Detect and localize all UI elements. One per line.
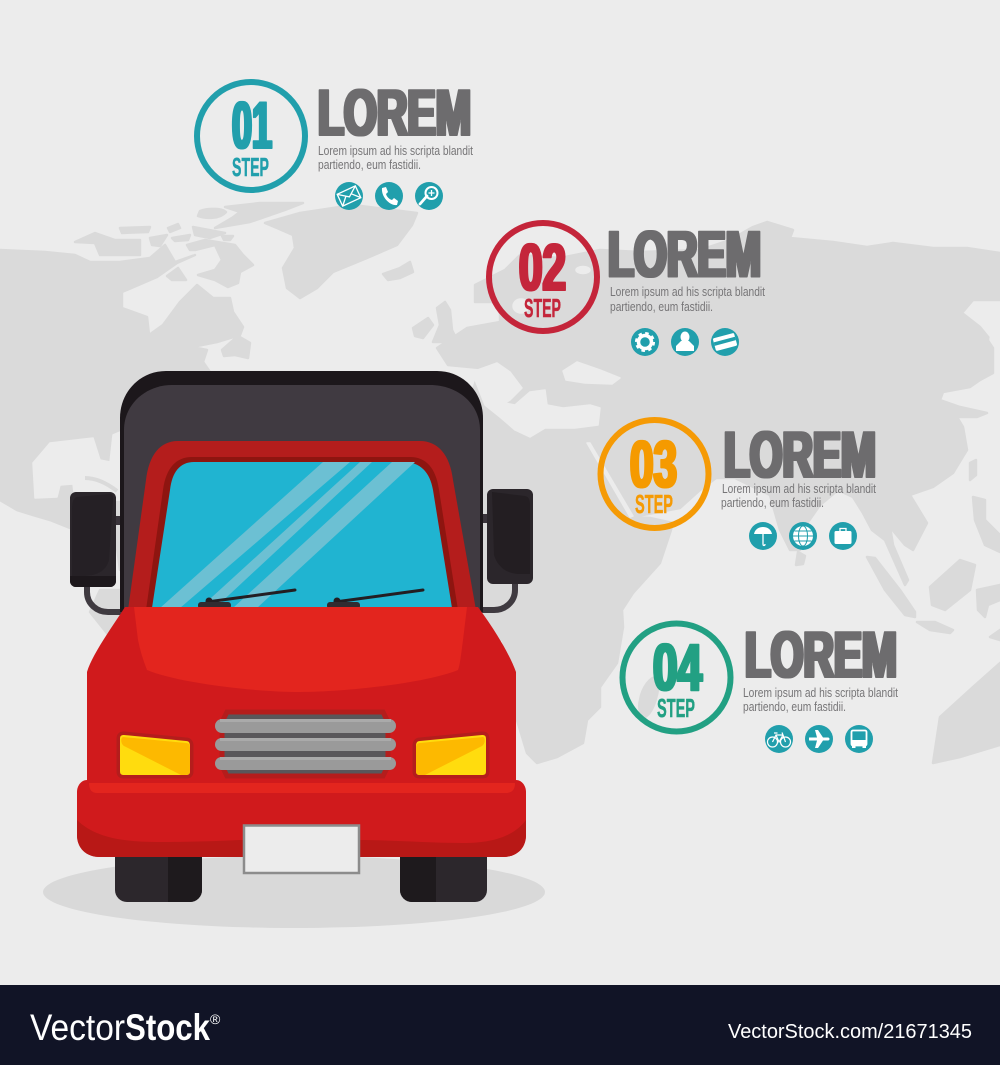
icon: person bbox=[671, 328, 699, 356]
map: seas cut from the land bbox=[33, 266, 1000, 517]
step 3 heading: LOREM bbox=[724, 418, 876, 491]
cab frame bbox=[128, 441, 476, 610]
truck shadow bbox=[43, 856, 545, 928]
step 4 bbox=[622, 618, 898, 753]
world map bbox=[0, 203, 1000, 763]
map: Cuba bbox=[85, 478, 117, 491]
icon: credit card bbox=[711, 328, 739, 356]
hood bbox=[134, 607, 467, 692]
icon: bicycle bbox=[765, 725, 793, 753]
mirror arm right bbox=[476, 582, 515, 610]
icon: gear bbox=[631, 328, 659, 356]
icon: bus bbox=[845, 725, 873, 753]
left wiper bbox=[198, 590, 295, 609]
step 2 number: 02 bbox=[519, 230, 566, 304]
windshield frame inner bbox=[146, 457, 458, 610]
step 2 text bbox=[610, 284, 765, 314]
mirror mounts bbox=[114, 514, 489, 525]
step 1 number: 01 bbox=[232, 88, 272, 162]
step 2 label: STEP bbox=[524, 293, 561, 323]
footer logo: Stock bbox=[125, 1007, 210, 1048]
step 3 ring bbox=[600, 420, 708, 528]
icon: globe bbox=[789, 522, 817, 550]
icon: envelope bbox=[335, 182, 363, 210]
icon: magnifier bbox=[415, 182, 443, 210]
windshield reflections bbox=[160, 462, 415, 608]
step 1 text: Lorem ipsum ad his scripta blandit bbox=[318, 143, 473, 158]
mirror arm left bbox=[87, 585, 128, 612]
icon: phone bbox=[375, 182, 403, 210]
step 4 ring bbox=[622, 624, 730, 732]
step 3 label: STEP bbox=[635, 489, 673, 519]
icon: briefcase bbox=[829, 522, 857, 550]
truck bbox=[70, 371, 533, 902]
step 4 label: STEP bbox=[657, 693, 695, 723]
step 2 heading: LOREM bbox=[608, 218, 761, 290]
step 3 text: Lorem ipsum ad his scripta blandit bbox=[722, 481, 876, 496]
cargo box front panel bbox=[124, 385, 480, 612]
footer logo: ® bbox=[210, 1011, 221, 1027]
icon: airplane bbox=[805, 725, 833, 753]
step 1 ring bbox=[197, 82, 305, 190]
step 3 number: 03 bbox=[630, 427, 677, 501]
step 2 ring bbox=[489, 223, 597, 331]
footer bar bbox=[0, 985, 1000, 1065]
step 4 heading: LOREM bbox=[745, 618, 897, 691]
right wiper bbox=[327, 590, 423, 609]
icon: umbrella bbox=[749, 522, 777, 550]
step 4 number: 04 bbox=[653, 630, 702, 704]
cargo box bbox=[120, 371, 483, 612]
right headlight bbox=[416, 735, 486, 775]
left mirror bbox=[70, 492, 116, 587]
step 1 label: STEP bbox=[232, 152, 269, 182]
step 3 text bbox=[721, 481, 876, 510]
license plate bbox=[244, 826, 359, 873]
step 1 text: partiendo, eum fastidii. bbox=[318, 157, 421, 172]
step 4 text: Lorem ipsum ad his scripta blandit bbox=[743, 685, 898, 700]
step 3 text: partiendo, eum fastidii. bbox=[721, 495, 824, 510]
footer logo: Vector bbox=[30, 1007, 125, 1048]
grille bbox=[215, 712, 396, 776]
step 4 text bbox=[743, 685, 898, 714]
left headlight bbox=[120, 735, 190, 775]
step 2 bbox=[489, 218, 765, 356]
footer logo bbox=[30, 1007, 221, 1048]
step 1 heading: LOREM bbox=[318, 76, 471, 149]
step 2 text: partiendo, eum fastidii. bbox=[610, 299, 713, 314]
truck body bbox=[87, 607, 516, 795]
footer image id: VectorStock.com/21671345 bbox=[728, 1021, 972, 1043]
windshield bbox=[152, 462, 452, 608]
bumper bbox=[77, 780, 526, 857]
left wheel bbox=[115, 850, 202, 902]
right wheel bbox=[400, 850, 487, 902]
grille bars bbox=[215, 719, 396, 770]
right mirror bbox=[487, 489, 533, 584]
step 3 bbox=[600, 418, 876, 550]
step 1 bbox=[197, 76, 473, 210]
step 2 text: Lorem ipsum ad his scripta blandit bbox=[610, 284, 765, 299]
step 1 text bbox=[318, 143, 473, 172]
step 4 text: partiendo, eum fastidii. bbox=[743, 699, 846, 714]
